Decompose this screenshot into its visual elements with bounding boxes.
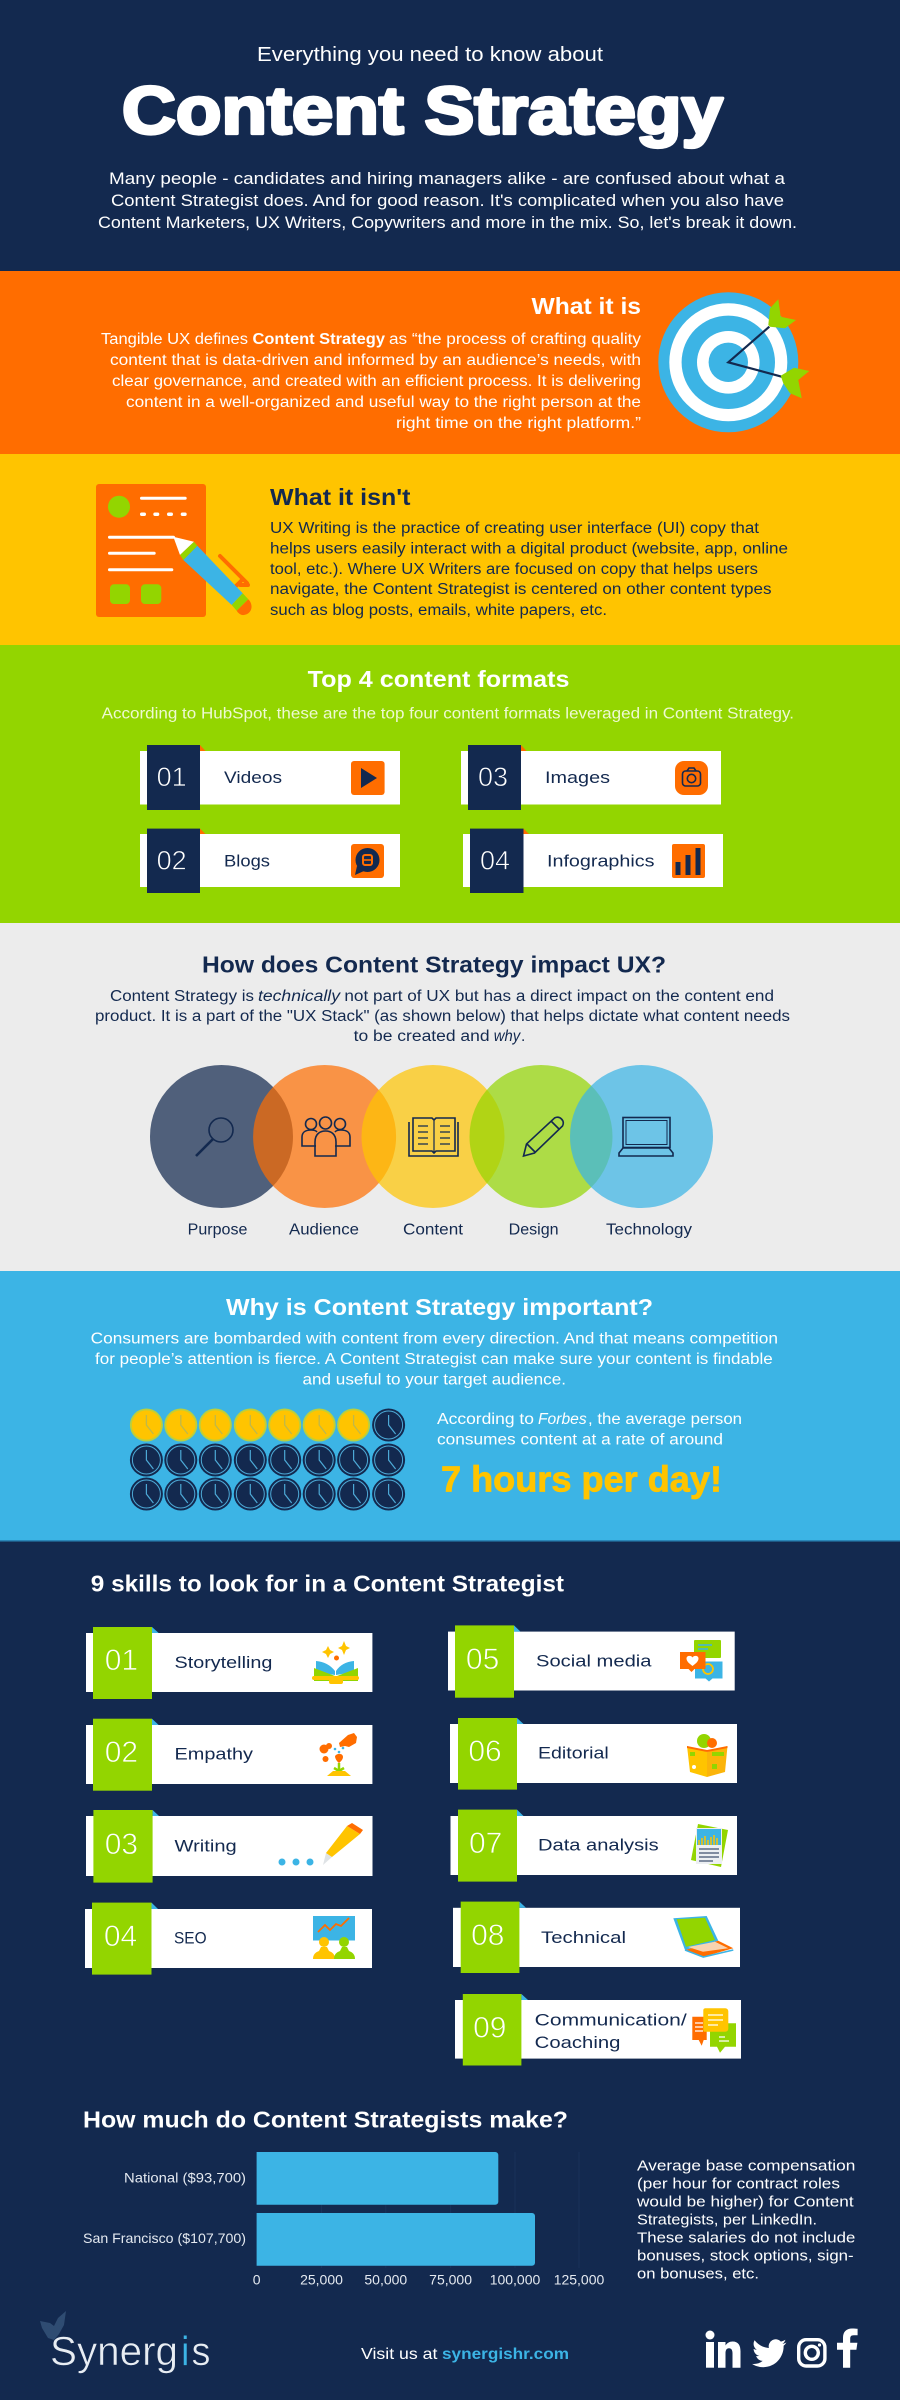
skill card: SEO — [85, 1903, 372, 1975]
website line: synergishr.com — [442, 2346, 569, 2363]
UX writing paragraph: tool, etc.). Where UX Writers are focused on copy that helps users — [270, 561, 758, 578]
definition paragraph — [101, 331, 641, 432]
salary note — [636, 2159, 855, 2283]
panel: 9 skills — [0, 1540, 900, 2400]
UX impact paragraph: why — [494, 1028, 521, 1045]
skill card: communication/coaching: Communication/ — [535, 2010, 687, 2030]
salary note: Average base compensation — [637, 2159, 855, 2175]
skill card: empathy: 02 — [105, 1736, 138, 1769]
skill card: writing: Writing — [174, 1837, 237, 1856]
skill card: data analysis — [450, 1810, 737, 1882]
UX impact paragraph: Content Strategy is — [110, 988, 254, 1005]
skill card: data analysis: 07 — [469, 1827, 502, 1860]
format card: infographics: Infographics — [547, 852, 654, 870]
icon: speech bubbles — [680, 1640, 722, 1682]
panel: impact on UX — [0, 923, 900, 1271]
definition paragraph: content that is data-driven and informed by an audience’s needs, with — [110, 352, 641, 369]
format card: blogs — [140, 829, 400, 893]
definition paragraph: right time on the right platform.” — [396, 415, 641, 432]
icon: laptop — [673, 1916, 733, 1957]
UX writing paragraph: UX Writing is the practice of creating user interface (UI) copy that — [270, 520, 760, 537]
icon: pencil and dots — [278, 1823, 363, 1866]
icon: story book — [312, 1641, 359, 1684]
format card: images — [461, 745, 721, 810]
skill card: writing — [86, 1810, 372, 1883]
skill card: social media — [448, 1625, 735, 1698]
skill card: writing: 03 — [105, 1828, 138, 1861]
salary bar chart: National ($93,700) — [124, 2170, 246, 2186]
Forbes statistic text: Forbes — [538, 1411, 587, 1428]
importance paragraph: for people’s attention is fierce. A Content Strategist can make sure your content is findable — [95, 1351, 773, 1368]
Forbes statistic text: According to — [437, 1411, 534, 1428]
axis ticks: 0 — [253, 2272, 261, 2288]
axis ticks — [253, 2272, 605, 2288]
skill card: social media: 05 — [466, 1643, 499, 1676]
skill card: SEO: 04 — [104, 1920, 137, 1953]
icon: linkedin — [706, 2330, 740, 2368]
logo: Synergis: s — [192, 2328, 210, 2374]
icon: people — [302, 1117, 350, 1156]
panel: top 4 content formats — [0, 645, 900, 923]
icon: target with darts — [658, 292, 809, 432]
UX writing paragraph: navigate, the Content Strategist is centered on other content types — [270, 581, 772, 598]
Forbes statistic text: consumes content at a rate of around — [437, 1432, 723, 1449]
skill card: technical: Technical — [541, 1928, 626, 1947]
icon: facebook — [837, 2328, 858, 2368]
format card: blogs: 02 — [157, 846, 187, 876]
skill card: SEO: SEO — [174, 1929, 207, 1948]
website line — [361, 2346, 569, 2363]
heading: what it isn't: What it isn't — [270, 484, 411, 510]
skill card: storytelling: Storytelling — [174, 1653, 272, 1672]
skill card: storytelling — [86, 1627, 372, 1699]
panel: why it matters — [0, 1271, 900, 1541]
icon: bar chart — [672, 844, 705, 878]
icon: document and pencil — [96, 484, 252, 617]
salary bar chart: San Francisco ($107,700) — [83, 2230, 246, 2246]
format card: blogs: Blogs — [224, 852, 270, 870]
heading: what it is: What it is — [532, 293, 641, 319]
skill card: social media: Social media — [536, 1652, 652, 1671]
logo: Synergis: i — [182, 2328, 189, 2374]
heading: top 4 formats: Top 4 content formats — [308, 666, 570, 692]
salary note: (per hour for contract roles — [637, 2177, 840, 2193]
definition paragraph: content in a well-organized and useful way to the right person at the — [126, 394, 641, 411]
axis ticks: 25,000 — [300, 2272, 343, 2288]
pictogram: 7 of 24 clocks — [130, 1408, 405, 1510]
main title: Content Strategy — [122, 74, 723, 148]
UX stack diagram — [150, 1065, 713, 1239]
icon: twitter — [752, 2339, 786, 2367]
axis ticks: 125,000 — [554, 2272, 605, 2288]
skill card: empathy: Empathy — [174, 1745, 254, 1764]
definition paragraph: as “the process of crafting quality — [389, 331, 641, 348]
panel: intro header — [0, 0, 900, 271]
logo: Synergis — [40, 2311, 210, 2374]
icon: camera — [675, 761, 708, 795]
stack labels: Design — [509, 1222, 559, 1239]
UX writing paragraph — [270, 520, 788, 619]
social icons — [706, 2328, 858, 2368]
icon: instagram — [799, 2340, 825, 2366]
intro paragraph: Many people - candidates and hiring managers alike - are confused about what a — [109, 170, 786, 188]
stack labels: Technology — [606, 1222, 692, 1239]
definition paragraph: clear governance, and created with an efficient process. It is delivering — [112, 373, 641, 390]
skill card: editorial: Editorial — [538, 1744, 609, 1763]
format card: videos — [140, 745, 400, 810]
Forbes statistic text: , the average person — [588, 1411, 742, 1428]
format card: images: 03 — [478, 762, 508, 792]
UX impact paragraph — [95, 988, 790, 1045]
heading: why important: Why is Content Strategy important? — [226, 1294, 653, 1320]
Forbes statistic text — [437, 1411, 742, 1449]
axis ticks: 75,000 — [429, 2272, 472, 2288]
icon: play — [351, 761, 385, 795]
icon: open book — [409, 1118, 458, 1156]
UX impact paragraph: technically — [258, 988, 341, 1005]
UX writing paragraph: helps users easily interact with a digital product (website, app, online — [270, 540, 788, 558]
intro paragraph — [98, 170, 797, 232]
salary note: would be higher) for Content — [636, 2195, 854, 2211]
formats subtitle: According to HubSpot, these are the top four content formats leveraged in Content Strategy. — [102, 705, 794, 722]
stack labels: Purpose — [188, 1222, 247, 1239]
stat: 7 hours per day: 7 hours per day! — [441, 1459, 722, 1500]
icon: butterfly — [40, 2311, 66, 2340]
bar: san francisco — [257, 2213, 535, 2266]
axis ticks: 50,000 — [364, 2272, 407, 2288]
icon: watering heart plant — [320, 1733, 357, 1776]
definition paragraph: Tangible UX defines — [101, 331, 248, 348]
salary note: These salaries do not include — [637, 2231, 855, 2247]
icon: chat bubbles — [692, 2008, 736, 2053]
skill card: technical: 08 — [471, 1919, 504, 1952]
UX writing paragraph: such as blog posts, emails, white papers, etc. — [270, 602, 607, 619]
intro paragraph: Content Marketers, UX Writers, Copywriters and more in the mix. So, let's break it down. — [98, 214, 797, 232]
importance paragraph: Consumers are bombarded with content from every direction. And that means competition — [91, 1331, 778, 1348]
skill card: editorial: 06 — [468, 1735, 502, 1768]
skill card: data analysis: Data analysis — [538, 1836, 659, 1855]
heading: UX impact: How does Content Strategy impact UX? — [202, 952, 666, 978]
format card: infographics — [463, 829, 723, 893]
UX impact paragraph: product. It is a part of the "UX Stack" (as shown below) that helps dictate what content needs — [95, 1008, 790, 1025]
format card: videos: 01 — [157, 762, 187, 792]
skill card: communication/coaching: Coaching — [535, 2033, 620, 2052]
icon: seo board and people — [313, 1916, 355, 1959]
icon: magnifier — [196, 1118, 233, 1156]
icon: pencil — [524, 1117, 563, 1156]
intro kicker: Everything you need to know about — [257, 44, 603, 66]
heading: salaries: How much do Content Strategists make? — [83, 2107, 568, 2133]
salary note: Strategists, per LinkedIn. — [637, 2213, 817, 2229]
panel: what it is — [0, 271, 900, 454]
bar: national — [257, 2152, 498, 2205]
salary note: bonuses, stock options, sign- — [637, 2249, 854, 2265]
icon: report — [691, 1824, 728, 1867]
skill card: communication/coaching — [455, 1994, 741, 2066]
format card: infographics: 04 — [480, 846, 510, 876]
UX impact paragraph: to be created and — [354, 1028, 490, 1045]
icon: laptop — [619, 1118, 673, 1156]
heading: 9 skills: 9 skills to look for in a Content Strategist — [91, 1571, 564, 1597]
skill card: storytelling: 01 — [105, 1644, 138, 1677]
importance paragraph — [91, 1331, 778, 1389]
skill card: empathy — [86, 1719, 372, 1791]
skill card: editorial — [450, 1718, 737, 1790]
axis ticks: 100,000 — [490, 2272, 541, 2288]
salary bar chart — [83, 2152, 605, 2288]
panel: what it isn't — [0, 454, 900, 645]
stack labels: Content — [403, 1222, 464, 1239]
importance paragraph: and useful to your target audience. — [302, 1372, 566, 1389]
skill card: communication/coaching: 09 — [473, 2012, 506, 2045]
skill card: technical — [453, 1902, 740, 1973]
intro paragraph: Content Strategist does. And for good reason. It's complicated when you also have — [111, 192, 784, 210]
stack labels: Audience — [289, 1222, 359, 1239]
icon: blogger — [351, 844, 384, 878]
salary note: on bonuses, etc. — [637, 2267, 759, 2283]
website line: Visit us at — [361, 2346, 438, 2363]
logo: Synergis: Synerg — [50, 2328, 178, 2374]
stack labels — [188, 1222, 692, 1239]
definition paragraph: Content Strategy — [252, 331, 385, 348]
format card: images: Images — [545, 768, 610, 787]
UX impact paragraph: . — [521, 1028, 525, 1045]
icon: magazine — [687, 1734, 728, 1777]
format card: videos: Videos — [224, 768, 282, 787]
UX impact paragraph: not part of UX but has a direct impact on the content end — [344, 988, 774, 1005]
